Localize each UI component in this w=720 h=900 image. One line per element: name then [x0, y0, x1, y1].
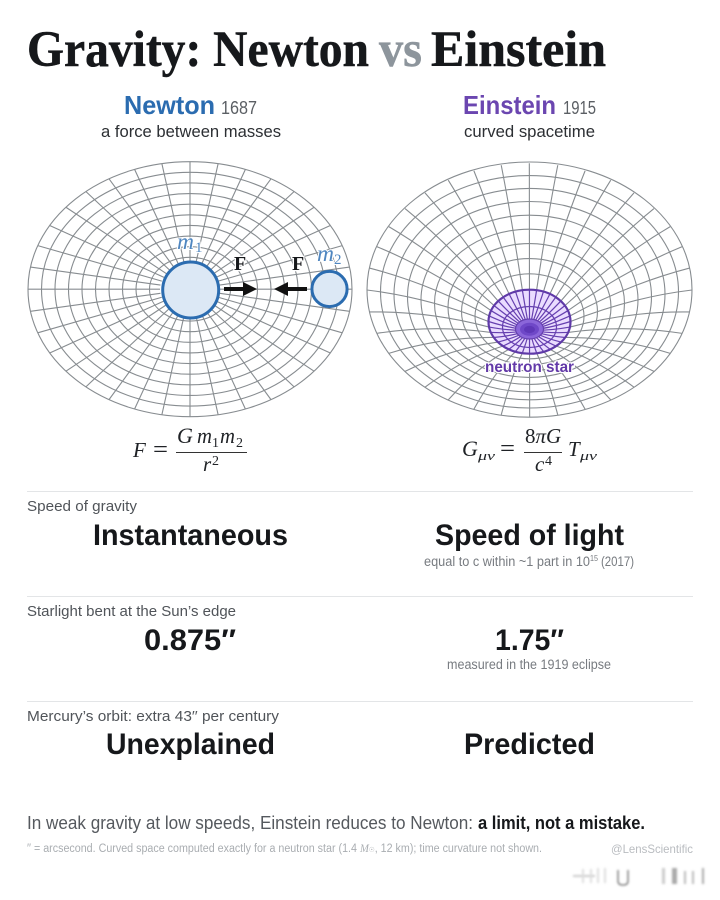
label m2: m	[317, 241, 334, 266]
formula: Einstein: c	[535, 452, 545, 476]
value: Unexplained: Unexplained	[106, 728, 275, 761]
neutron star	[488, 290, 570, 361]
formula: Einstein: G	[462, 436, 478, 461]
formula: Newton: 2	[236, 436, 243, 451]
formula: Newton: =	[153, 437, 168, 463]
label m1: 1	[195, 240, 202, 256]
row label: starlight bending: Starlight bent at the Sun’s edge	[27, 603, 236, 620]
diagram: Einstein curved spacetime funnel	[367, 162, 692, 448]
formula: Newton: m	[197, 423, 212, 448]
value: Predicted: Predicted	[464, 728, 595, 761]
formula: Einstein: G	[546, 424, 561, 448]
formula: Newton: G	[177, 423, 193, 448]
row label: speed of gravity: Speed of gravity	[27, 498, 137, 515]
title: Einstein	[431, 22, 606, 78]
value: 1.75 arcseconds: 1.75′′	[495, 624, 564, 657]
formula: Newton: r	[203, 452, 212, 476]
formula: Newton: m	[220, 423, 235, 448]
flat grid	[28, 162, 352, 417]
formula: Newton	[132, 423, 247, 476]
heading: Newton 1687: 1687	[221, 98, 257, 118]
note: gravity speed measurement: (2017)	[601, 554, 634, 569]
label m2	[317, 241, 342, 268]
value: Speed of light: Speed of light	[435, 519, 624, 552]
value: 0.875 arcseconds: 0.875′′	[144, 624, 236, 657]
formula: Einstein: T	[568, 437, 581, 461]
formula: Einstein: 8	[525, 424, 536, 448]
subtitle: Einstein: curved spacetime	[464, 122, 595, 141]
formula: Newton: 1	[212, 436, 219, 451]
title	[27, 22, 606, 78]
formula: Einstein: 4	[545, 454, 552, 469]
formula: Einstein: π	[536, 424, 546, 448]
force label left: F	[234, 253, 246, 275]
label m1	[177, 229, 202, 256]
mass m1	[163, 262, 219, 318]
title: Gravity: Newton	[27, 22, 369, 78]
formula: Einstein: μν	[579, 448, 597, 463]
label m2: 2	[334, 252, 342, 268]
force label right: F	[292, 253, 304, 275]
note: 1919 eclipse: measured in the 1919 eclipse	[447, 657, 611, 672]
title: vs	[379, 22, 422, 78]
label m1: m	[177, 229, 194, 254]
curved grid	[367, 162, 692, 448]
conclusion: In weak gravity at low speeds, Einstein reduces to Newton:	[27, 813, 473, 833]
conclusion: a limit, not a mistake.	[478, 813, 645, 833]
value: Instantaneous: Instantaneous	[93, 519, 288, 552]
footnote: ′′ = arcsecond. Curved space computed exactly for a neutron star (1.4 M☉, 12 km); time curvature not shown.	[27, 843, 542, 855]
credit: @LensScientific	[611, 842, 693, 856]
note: gravity speed measurement: equal to c within ~1 part in 10	[424, 554, 590, 569]
heading: Newton 1687: Newton	[124, 90, 215, 120]
watermark smudge	[573, 868, 704, 885]
heading: Einstein 1915: Einstein	[463, 90, 556, 120]
note: gravity speed measurement: 15	[590, 554, 598, 563]
formula: Einstein: =	[500, 436, 515, 462]
mass m2	[312, 271, 347, 307]
formula: Newton: F	[132, 438, 146, 462]
label: neutron star: neutron star	[485, 359, 574, 376]
diagram: Newton flat polar grid with two masses	[28, 162, 352, 417]
arrow: force on m1	[224, 282, 257, 296]
formula: Newton: 2	[212, 454, 219, 469]
formula: Einstein: μν	[477, 448, 495, 463]
subtitle: Newton: a force between masses	[101, 122, 281, 141]
formula: Einstein	[462, 424, 597, 476]
row label: Mercury orbit: Mercury’s orbit: extra 43′′ per century	[27, 708, 280, 725]
arrow: force on m2	[274, 282, 307, 296]
heading: Einstein 1915: 1915	[563, 98, 596, 118]
